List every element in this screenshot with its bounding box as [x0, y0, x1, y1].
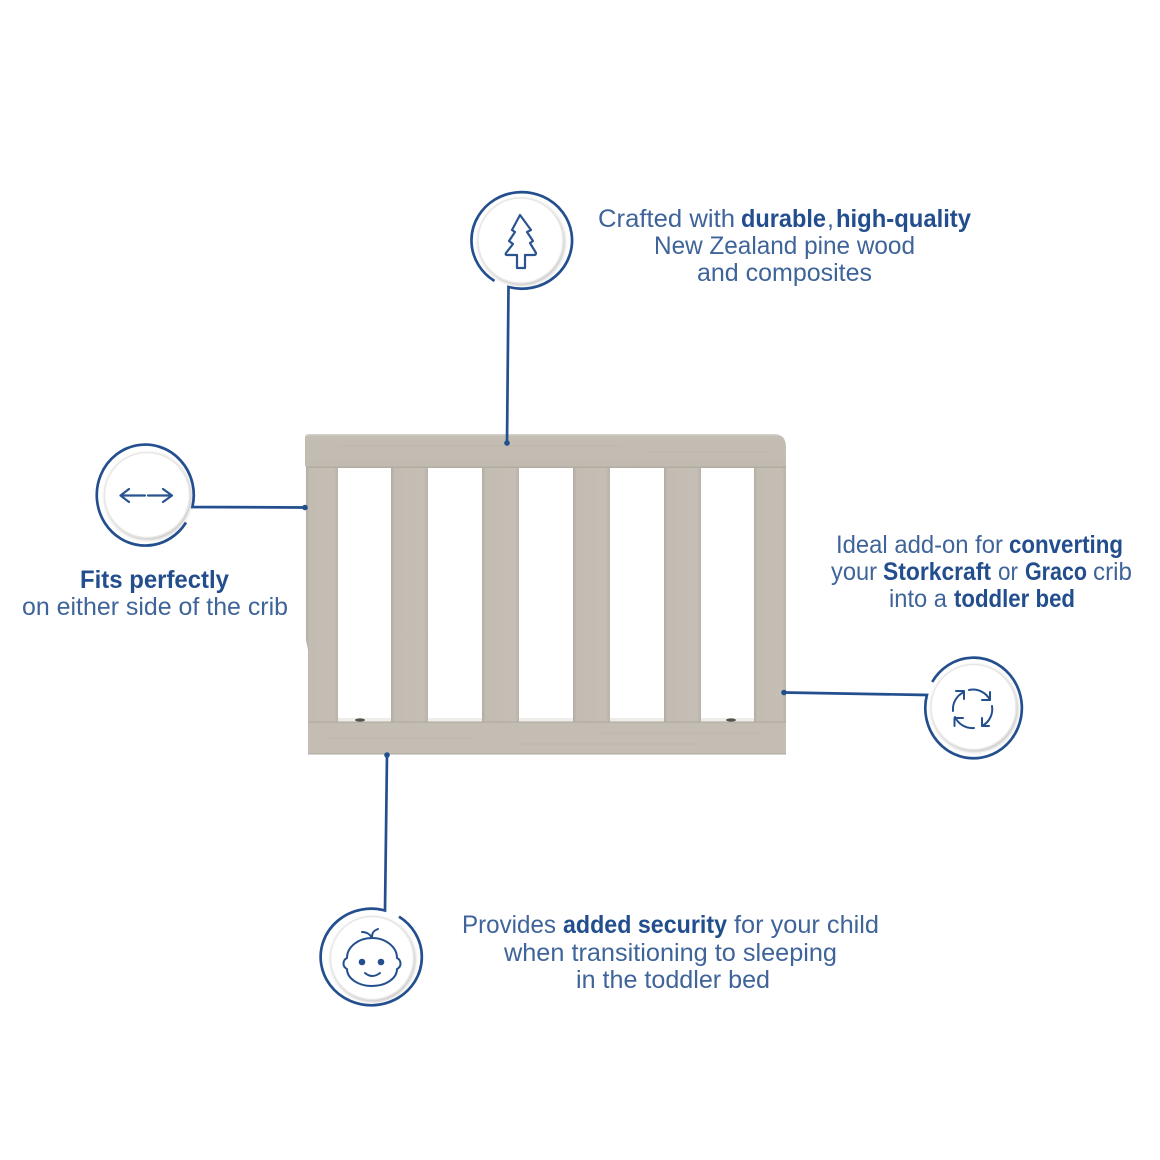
- text: durable materials: ,: [827, 205, 834, 233]
- text: added security: [462, 911, 879, 994]
- text: crib conversion: Graco: [1025, 558, 1087, 586]
- text: crib conversion: into a: [889, 585, 947, 613]
- callout: right, crib conversion: [781, 531, 1132, 758]
- bottom rail: [308, 722, 786, 754]
- callout ring and leader line: [784, 658, 1022, 758]
- text: crib conversion: converting: [1009, 531, 1123, 559]
- callout: top, durable materials: [471, 192, 971, 446]
- mounting screws: [355, 718, 736, 722]
- callout: bottom, added security: [321, 752, 879, 1005]
- text: added security: for your child: [734, 911, 879, 939]
- text: crib conversion: or: [998, 558, 1018, 586]
- text: durable materials: [598, 205, 971, 287]
- text: crib conversion: toddler bed: [954, 585, 1075, 613]
- text: crib conversion: crib: [1093, 558, 1132, 586]
- icon disc: [478, 198, 563, 283]
- icon disc: [104, 452, 190, 538]
- text: crib conversion: [831, 531, 1132, 613]
- text: fits perfectly: on either side of the crib: [22, 593, 288, 621]
- text: durable materials: high-quality: [836, 205, 971, 233]
- callout ring and leader line: [321, 755, 422, 1005]
- callout ring and leader line: [471, 192, 572, 443]
- text: added security: added security: [563, 911, 727, 939]
- text: crib conversion: your: [831, 558, 877, 586]
- text: added security: Provides: [462, 911, 556, 939]
- text: fits perfectly: Fits perfectly: [80, 566, 229, 594]
- toddler rail product image: [305, 434, 786, 754]
- icon: baby face: [344, 929, 400, 986]
- text: durable materials: Crafted with: [598, 205, 735, 233]
- left stile: [306, 466, 338, 723]
- wooden slats: [391, 466, 701, 722]
- callout ring and leader line: [97, 445, 305, 546]
- top rail: [305, 434, 786, 468]
- text: durable materials: and composites: [697, 259, 872, 287]
- text: crib conversion: Storkcraft: [883, 558, 992, 586]
- icon: pine tree: [506, 215, 536, 268]
- text: fits perfectly: [22, 566, 288, 621]
- icon disc: [931, 664, 1016, 750]
- text: added security: when transitioning to sleeping: [503, 939, 837, 967]
- text: crib conversion: Ideal add-on for: [836, 531, 1003, 559]
- icon: double arrow: [120, 489, 172, 502]
- icon: conversion cycle arrows: [953, 690, 992, 728]
- text: durable materials: New Zealand pine wood: [654, 232, 915, 260]
- text: durable materials: durable: [741, 205, 826, 233]
- callout: left, fits perfectly: [22, 445, 308, 621]
- text: added security: in the toddler bed: [576, 966, 770, 994]
- right stile: [754, 466, 786, 723]
- icon disc: [330, 916, 414, 1000]
